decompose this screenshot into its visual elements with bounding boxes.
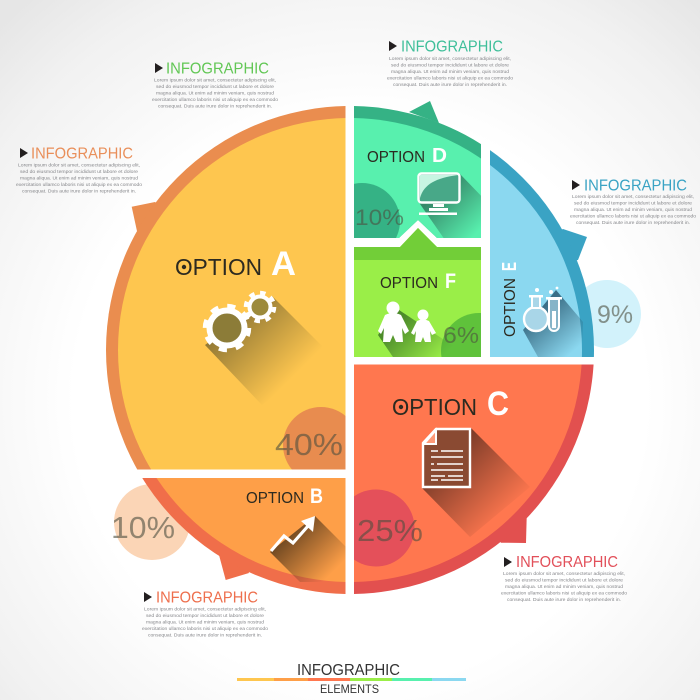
icon: gears (206, 293, 274, 350)
value: 40%: 40% (275, 427, 343, 462)
heading: option B (246, 485, 323, 508)
text block: top teal: magna aliqua. Ut enim ad minim veniam, quis nostrud (391, 69, 509, 75)
text block: top green: exercitation ullamco laboris nisi ut aliquip ex ea commodo (152, 97, 278, 103)
text block: bottom orange-red: INFOGRAPHIC (156, 590, 258, 606)
value: 25%: 25% (357, 513, 423, 548)
panel: option A (106, 106, 346, 470)
text block: left orange: consequat. Duis aute irure dolor in reprehenderit in. (22, 188, 136, 194)
text block: left orange: exercitation ullamco laboris nisi ut aliquip ex ea commodo (16, 182, 142, 188)
text block: right red: Lorem ipsum dolor sit amet, consectetur adipiscing elit, (503, 571, 625, 577)
text block: left orange (16, 146, 142, 194)
heading: option B: B (310, 485, 323, 508)
value: 6%: 6% (443, 322, 479, 348)
icon: flasks (524, 287, 562, 331)
heading: option D: OPTION (367, 149, 425, 166)
text block: right red: sed do eiusmod tempor incididunt ut labore et dolore (505, 578, 623, 584)
heading: option F: OPTION (380, 275, 438, 292)
text block: top teal: INFOGRAPHIC (401, 38, 503, 56)
text block: right red: magna aliqua. Ut enim ad minim veniam, quis nostrud (505, 584, 623, 590)
panel: option D (354, 101, 481, 238)
text block: top green: magna aliqua. Ut enim ad minim veniam, quis nostrud (156, 90, 274, 96)
heading: option D: D (432, 145, 447, 167)
text block: bottom orange-red: consequat. Duis aute irure dolor in reprehenderit in. (148, 632, 262, 638)
heading: option E: OPTION (502, 278, 519, 337)
text block: right blue: exercitation ullamco laboris nisi ut aliquip ex ea commodo (570, 214, 696, 220)
title: INFOGRAPHIC (297, 662, 400, 679)
value: 10%: 10% (111, 510, 175, 545)
text block: right blue: sed do eiusmod tempor incididunt ut labore et dolore (574, 200, 692, 206)
circle: 9% (573, 280, 641, 348)
icon: document (423, 429, 470, 487)
text block: top teal (387, 38, 513, 88)
text block: top green (152, 60, 278, 110)
title (237, 662, 466, 696)
text block: right blue (570, 178, 696, 226)
text block: bottom orange-red (142, 590, 268, 638)
heading: option A: OPTION (175, 254, 262, 280)
heading: option E (499, 262, 521, 337)
text block: left orange: INFOGRAPHIC (31, 146, 133, 162)
text block: right blue: magna aliqua. Ut enim ad minim veniam, quis nostrud (574, 207, 692, 213)
text block: left orange: magna aliqua. Ut enim ad minim veniam, quis nostrud (20, 176, 138, 182)
text block: top green: Lorem ipsum dolor sit amet, consectetur adipiscing elit, (154, 78, 276, 84)
heading: option C (392, 385, 509, 423)
text block: right blue: consequat. Duis aute irure dolor in reprehenderit in. (576, 220, 690, 226)
heading: option C: OPTION (392, 394, 477, 420)
text block: bottom orange-red: Lorem ipsum dolor sit amet, consectetur adipiscing elit, (144, 606, 266, 612)
heading: option B: OPTION (246, 490, 304, 507)
text block: top teal: sed do eiusmod tempor incididunt ut labore et dolore (391, 62, 509, 68)
text block: right blue: Lorem ipsum dolor sit amet, consectetur adipiscing elit, (572, 194, 694, 200)
icon: rising arrow (271, 516, 315, 551)
panel: option F (354, 228, 481, 357)
heading: option C: C (487, 385, 509, 423)
heading: option A: A (271, 245, 296, 283)
icon: people (378, 302, 436, 342)
text block: top green: sed do eiusmod tempor incididunt ut labore et dolore (156, 84, 274, 90)
text block: top teal: Lorem ipsum dolor sit amet, consectetur adipiscing elit, (389, 56, 511, 62)
text block: right red: exercitation ullamco laboris nisi ut aliquip ex ea commodo (501, 590, 627, 596)
icon: monitor (418, 174, 460, 215)
heading: option F: F (445, 270, 456, 293)
text block: left orange: Lorem ipsum dolor sit amet, consectetur adipiscing elit, (18, 162, 140, 168)
panel: option E (490, 150, 594, 357)
text block: top green: consequat. Duis aute irure dolor in reprehenderit in. (158, 104, 272, 110)
text block: bottom orange-red: magna aliqua. Ut enim ad minim veniam, quis nostrud (146, 620, 264, 626)
text block: top teal: exercitation ullamco laboris nisi ut aliquip ex ea commodo (387, 76, 513, 82)
panel: option B (142, 478, 346, 594)
text block: top teal: consequat. Duis aute irure dolor in reprehenderit in. (393, 82, 507, 88)
panel: option C (354, 364, 594, 594)
text block: right red: INFOGRAPHIC (516, 554, 618, 571)
text block: bottom orange-red: sed do eiusmod tempor incididunt ut labore et dolore (146, 613, 264, 619)
heading: option A (175, 245, 296, 283)
value: 9%: 9% (597, 301, 633, 329)
text block: top green: INFOGRAPHIC (166, 60, 269, 78)
heading: option D (367, 145, 447, 167)
heading: option E: E (499, 262, 521, 271)
text block: right blue: INFOGRAPHIC (584, 178, 687, 194)
title: ELEMENTS (320, 682, 379, 696)
text block: bottom orange-red: exercitation ullamco laboris nisi ut aliquip ex ea commodo (142, 626, 268, 632)
text block: right red (501, 554, 627, 603)
circle: 10% (114, 484, 190, 560)
text block: left orange: sed do eiusmod tempor incididunt ut labore et dolore (20, 169, 138, 175)
heading: option F (380, 270, 456, 293)
text block: right red: consequat. Duis aute irure dolor in reprehenderit in. (507, 597, 621, 603)
value: 10%: 10% (355, 205, 404, 230)
